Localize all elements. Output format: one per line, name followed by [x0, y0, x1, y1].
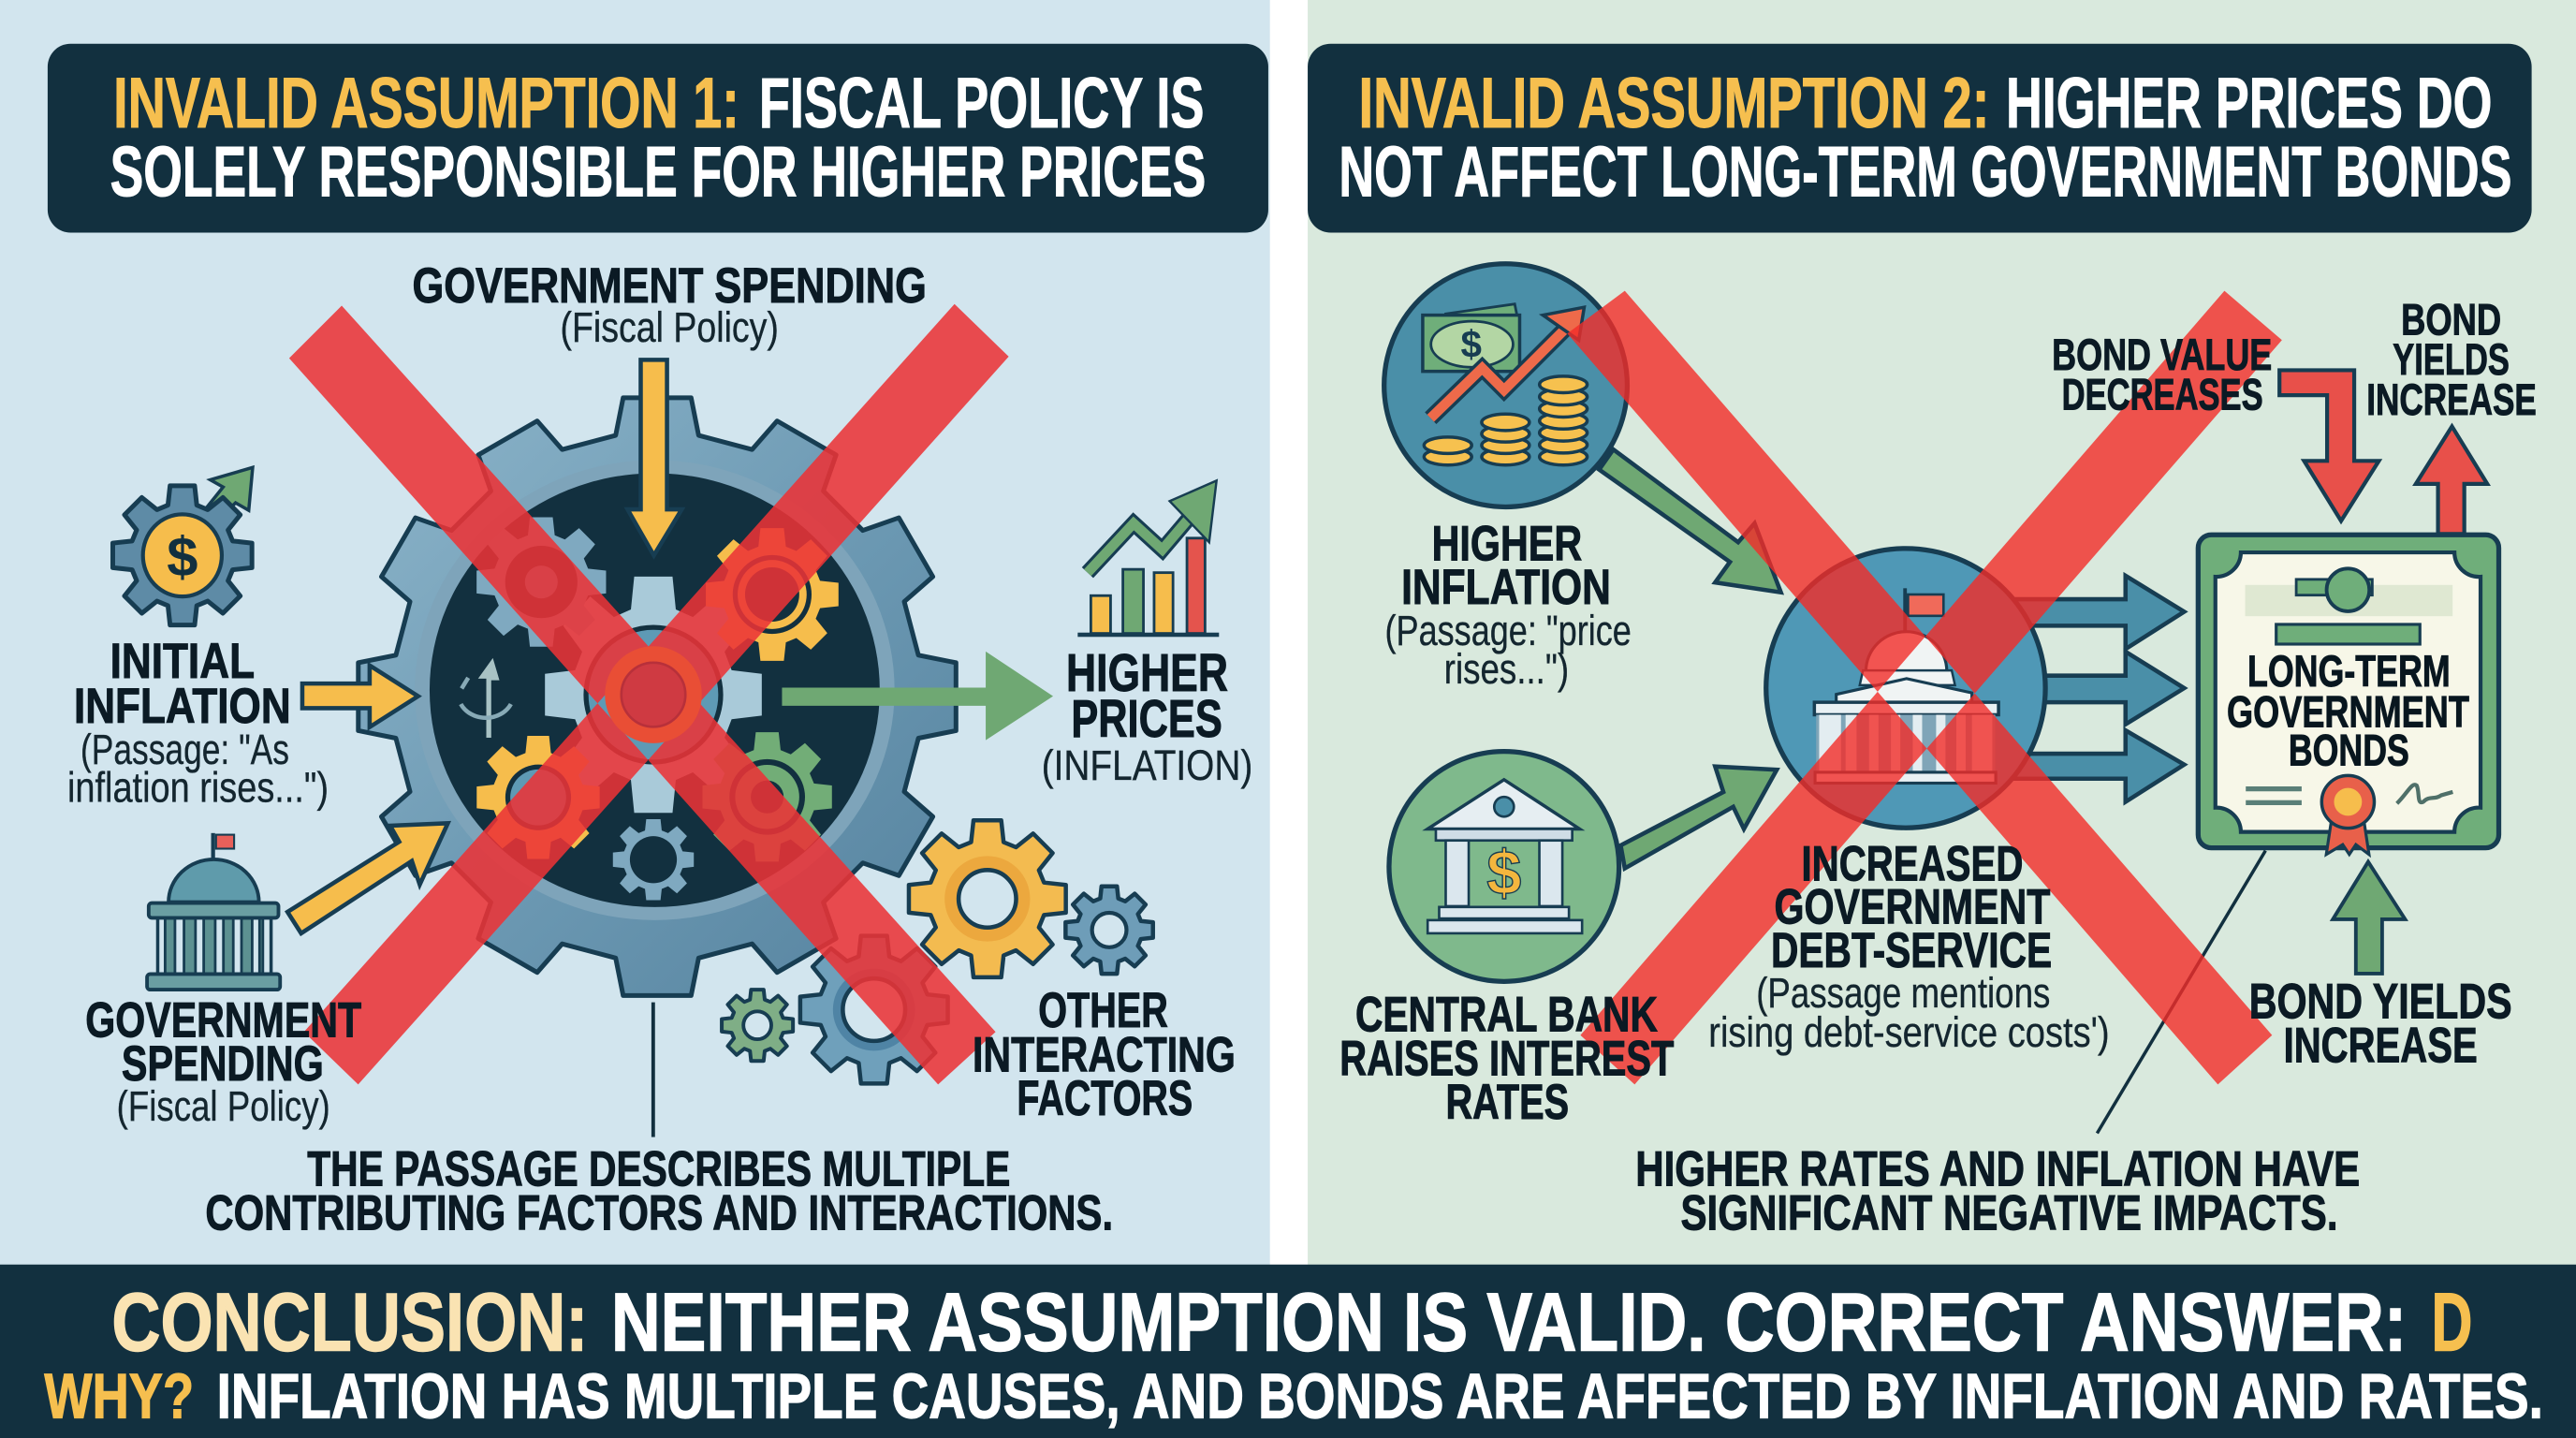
label: government spending left: (Fiscal Policy)	[117, 1082, 330, 1130]
label: initial inflation: INITIAL	[110, 634, 255, 689]
label: bond yields increase top: YIELDS	[2393, 335, 2510, 385]
label: other interacting factors: FACTORS	[1017, 1071, 1193, 1126]
bond label	[2227, 647, 2469, 775]
conclusion line: D	[2432, 1277, 2472, 1369]
label: increased debt service: DEBT-SERVICE	[1771, 923, 2052, 978]
bond label: LONG-TERM	[2247, 647, 2451, 697]
caption: multiple factors	[205, 1141, 1113, 1241]
label: increased debt service: INCREASED	[1801, 837, 2023, 892]
heading: assumption 1: FISCAL POLICY IS	[759, 64, 1204, 143]
arrow: bond yields from below	[2333, 862, 2405, 974]
central gear assembly	[359, 398, 956, 995]
icon: higher inflation circle: $	[1460, 323, 1482, 366]
bond label: GOVERNMENT	[2227, 688, 2469, 738]
label: higher prices: HIGHER	[1066, 643, 1228, 702]
label: higher prices	[1042, 643, 1252, 789]
icon: cycle arrow	[461, 658, 511, 738]
heading: assumption 1	[48, 44, 1268, 233]
label: initial inflation	[67, 634, 329, 811]
label: higher inflation	[1385, 516, 1632, 693]
icon: interacting gears	[722, 820, 1153, 1083]
label: other interacting factors: INTERACTING	[973, 1027, 1236, 1082]
rosette seal	[2321, 775, 2374, 855]
small gear bottom	[613, 819, 694, 900]
why line: WHY?	[44, 1362, 194, 1432]
label: bond yields increase top	[2366, 296, 2537, 425]
label: government spending top	[413, 258, 927, 351]
connector line	[2097, 851, 2265, 1133]
arrow: fiscal policy down	[627, 360, 681, 555]
small gear lower right	[702, 732, 832, 861]
coin stacks	[1424, 376, 1588, 465]
caption: multiple factors: CONTRIBUTING FACTORS AND INTERACTIONS.	[205, 1186, 1113, 1241]
arrow: bond value decreases	[2279, 370, 2378, 521]
label: government spending left	[85, 992, 361, 1130]
label: higher inflation: (Passage: "price	[1385, 607, 1632, 654]
arrow: government spending	[287, 823, 447, 933]
icon: central bank circle: $	[1486, 839, 1521, 908]
heading: assumption 1: SOLELY RESPONSIBLE FOR HIGHER PRICES	[110, 133, 1206, 213]
arrow: higher prices	[782, 652, 1053, 741]
label: central bank raises rates	[1339, 988, 1674, 1130]
panel: invalid assumption 2	[1308, 0, 2576, 1267]
label: government spending left: SPENDING	[122, 1036, 324, 1092]
label: other interacting factors: OTHER	[1038, 983, 1168, 1038]
panel: invalid assumption 1	[0, 0, 1270, 1267]
label: higher inflation: rises...")	[1444, 645, 1569, 693]
arrows: debt to bonds	[2012, 576, 2184, 801]
label: government spending top: GOVERNMENT SPENDING	[413, 258, 927, 314]
icon: price chart	[1077, 480, 1219, 637]
icon: government building	[147, 833, 280, 990]
label: bond yields increase bottom	[2249, 975, 2512, 1074]
label: higher prices: (INFLATION)	[1042, 741, 1252, 789]
arrow: central bank to debt	[1620, 767, 1777, 869]
caption: negative impacts: SIGNIFICANT NEGATIVE IMPACTS.	[1680, 1186, 2338, 1241]
conclusion bar	[0, 1265, 2576, 1438]
red X: right	[1567, 291, 2282, 1084]
arrow: initial inflation	[302, 666, 418, 727]
small gear lower left	[476, 736, 600, 858]
central light gear	[545, 577, 762, 813]
icon: government debt circle	[1766, 549, 2045, 828]
label: increased debt service: (Passage mentions	[1756, 969, 2050, 1017]
label: bond value decreases	[2052, 330, 2272, 420]
caption: negative impacts: HIGHER RATES AND INFLATION HAVE	[1635, 1141, 2360, 1196]
label: government spending top: (Fiscal Policy)	[560, 303, 779, 351]
label: higher inflation: INFLATION	[1401, 560, 1611, 615]
label: higher prices: PRICES	[1071, 689, 1222, 748]
label: bond yields increase bottom: BOND YIELDS	[2249, 975, 2512, 1030]
heading: assumption 1: INVALID ASSUMPTION 1:	[113, 64, 739, 143]
arrow: inflation to debt	[1599, 449, 1781, 593]
label: bond yields increase bottom: INCREASE	[2284, 1019, 2478, 1074]
icon: inflation gear	[112, 467, 253, 625]
heading: assumption 2	[1308, 44, 2532, 233]
label: central bank raises rates: CENTRAL BANK	[1355, 988, 1658, 1043]
label: other interacting factors	[973, 983, 1236, 1126]
label: increased debt service: rising debt-service costs')	[1708, 1008, 2110, 1056]
icon: higher inflation circle	[1384, 264, 1627, 506]
small gear upper left	[476, 518, 606, 647]
bond label: BONDS	[2289, 726, 2409, 775]
icon: central bank circle	[1389, 752, 1619, 981]
label: increased debt service: GOVERNMENT	[1775, 879, 2050, 934]
red X: left	[289, 304, 1009, 1084]
heading: assumption 2: INVALID ASSUMPTION 2:	[1358, 64, 1989, 143]
arrow: bond yields up	[2416, 426, 2487, 534]
label: bond value decreases: BOND VALUE	[2052, 330, 2272, 380]
label: central bank raises rates: RAISES INTEREST	[1339, 1032, 1674, 1087]
label: central bank raises rates: RATES	[1445, 1075, 1569, 1130]
icon: bond certificate	[2198, 535, 2499, 855]
label: initial inflation: inflation rises...")	[67, 763, 329, 811]
conclusion line: CONCLUSION:	[111, 1277, 588, 1369]
label: higher inflation: HIGHER	[1432, 516, 1582, 571]
label: bond value decreases: DECREASES	[2062, 371, 2263, 420]
connector line	[651, 1003, 655, 1137]
label: initial inflation: INFLATION	[74, 679, 291, 734]
label: initial inflation: (Passage: "As	[80, 726, 289, 773]
label: government spending left: GOVERNMENT	[85, 992, 361, 1048]
small gear upper right	[706, 528, 839, 661]
label: bond yields increase top: BOND	[2401, 296, 2501, 345]
caption: multiple factors: THE PASSAGE DESCRIBES MULTIPLE	[307, 1141, 1010, 1196]
icon: inflation gear: $	[167, 525, 198, 588]
caption: negative impacts	[1635, 1141, 2360, 1241]
label: increased debt service	[1708, 837, 2110, 1056]
